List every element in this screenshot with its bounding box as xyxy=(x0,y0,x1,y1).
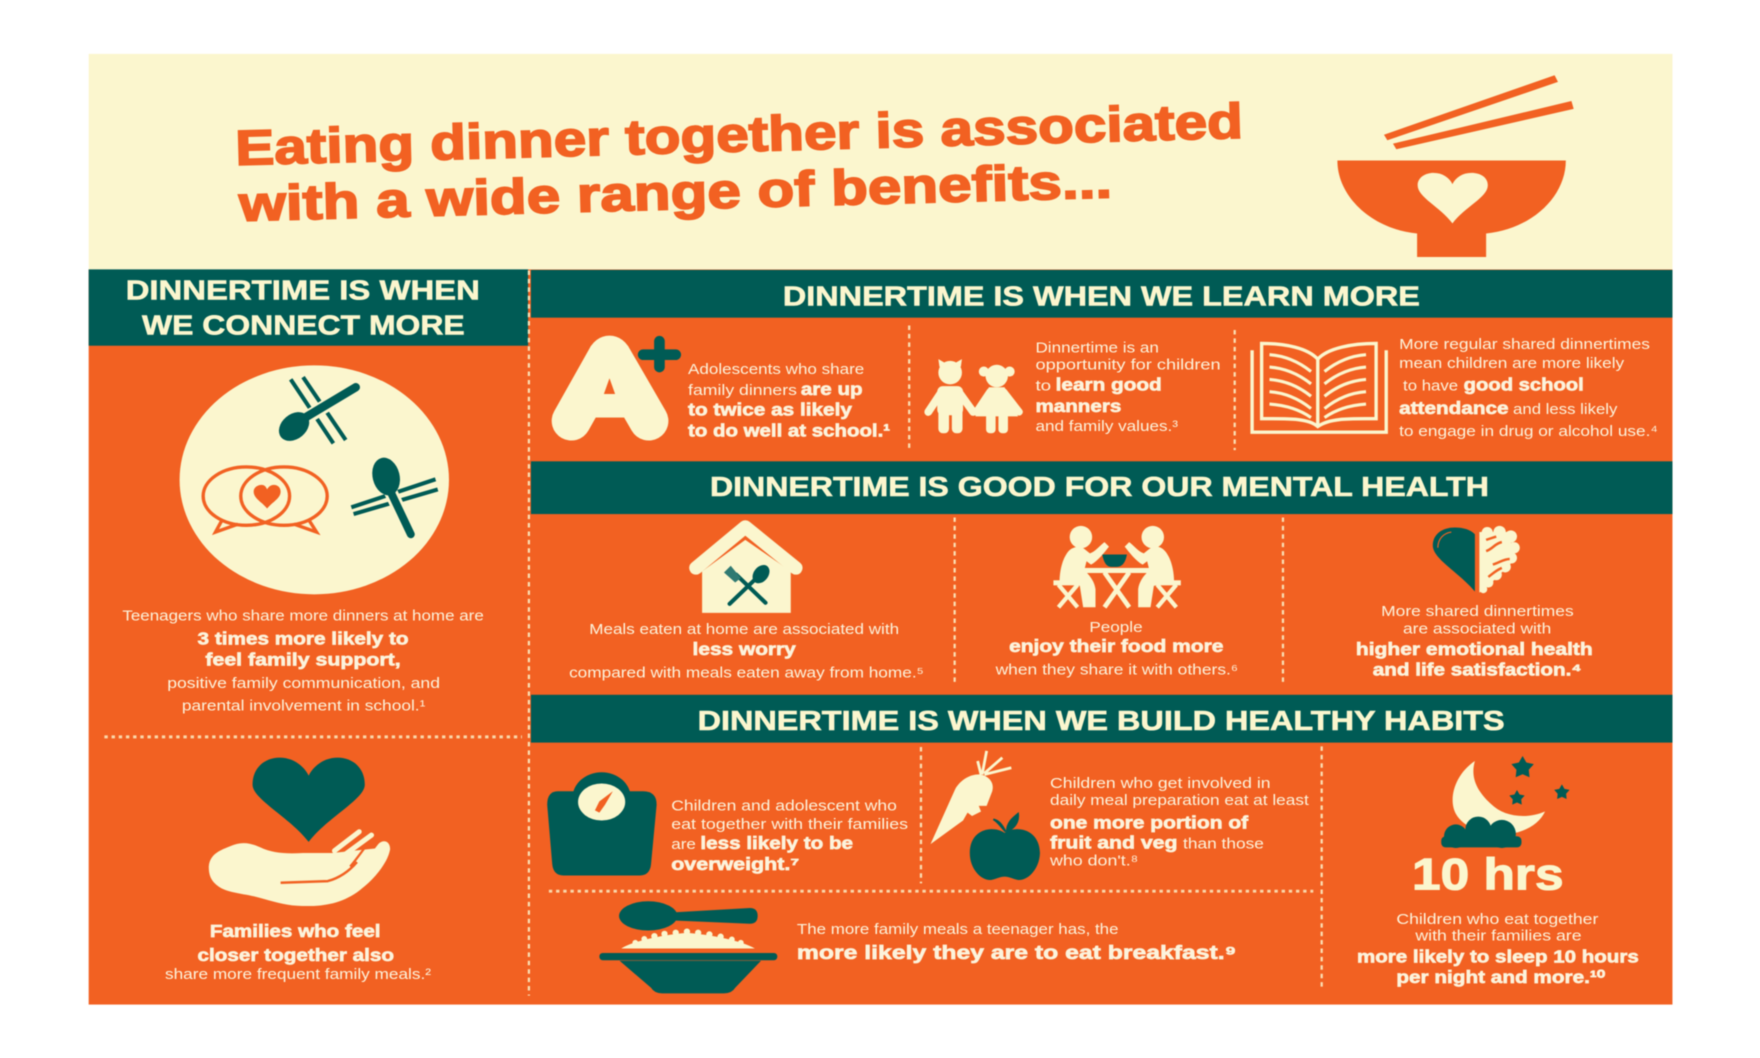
text: adolescents: are up xyxy=(801,379,863,399)
icon: half heart half brain xyxy=(1433,526,1520,593)
text: emotional health: More shared dinnertimes xyxy=(1381,603,1574,620)
text: manners: opportunity for children xyxy=(1035,356,1221,373)
text: families: Families who feel xyxy=(210,921,381,941)
panel: connect more xyxy=(89,269,528,983)
text: fruit and veg: one more portion of xyxy=(1050,812,1248,832)
icon: two children xyxy=(928,359,1019,433)
text: manners: learn good xyxy=(1056,375,1162,395)
text: emotional health: are associated with xyxy=(1403,620,1551,637)
text: sleep: with their families are xyxy=(1414,928,1582,945)
text: adolescents: family dinners xyxy=(688,382,797,399)
icon: A plus grade xyxy=(571,341,676,421)
text: attendance xyxy=(1399,336,1658,440)
text: emotional health xyxy=(1356,603,1593,680)
heading: connect more: DINNERTIME IS WHEN xyxy=(126,275,480,306)
icon: weighing scale xyxy=(547,772,657,875)
panel: healthy habits xyxy=(531,695,1672,993)
text: teenagers: parental involvement in school.¹ xyxy=(182,697,425,714)
icon: carrot and apple xyxy=(931,751,1040,880)
icon: heart above hand xyxy=(209,758,390,906)
text: overweight: Children and adolescent who xyxy=(671,797,897,814)
text: less worry: Meals eaten at home are associated with xyxy=(589,621,899,638)
text: fruit and veg: daily meal preparation eat at least xyxy=(1050,792,1310,809)
heading: learn more: DINNERTIME IS WHEN WE LEARN MORE xyxy=(783,280,1420,311)
text: attendance: More regular shared dinnertimes xyxy=(1399,336,1650,353)
text: manners: Dinnertime is an xyxy=(1035,339,1159,356)
text: attendance: to have xyxy=(1403,378,1458,395)
text: teenagers: positive family communication, and xyxy=(167,675,440,692)
icon: house with fork and spoon xyxy=(696,527,796,613)
title: Eating dinner together is associated xyxy=(235,94,1244,176)
text: emotional health: higher emotional health xyxy=(1356,639,1593,659)
text: teenagers: 3 times more likely to xyxy=(198,628,409,648)
text: manners: to xyxy=(1035,378,1051,395)
text: breakfast xyxy=(797,921,1236,964)
stat: 10 hrs: 10 hrs xyxy=(1412,849,1564,900)
icon: breakfast bowl and spoon xyxy=(599,901,777,993)
text: manners: manners xyxy=(1035,396,1121,416)
text: families: closer together also xyxy=(198,945,394,965)
text: manners xyxy=(1035,339,1221,435)
text: attendance: good school xyxy=(1464,375,1584,395)
text: overweight: are xyxy=(671,836,696,853)
text: teenagers xyxy=(122,608,484,714)
text: less worry: less worry xyxy=(693,639,796,659)
text: enjoy food: People xyxy=(1089,619,1143,636)
text: manners: and family values.³ xyxy=(1035,418,1178,435)
text: overweight: overweight.⁷ xyxy=(671,854,799,874)
panel: learn more xyxy=(531,270,1672,450)
text: enjoy food xyxy=(994,619,1238,679)
text: less worry xyxy=(569,621,924,681)
text: attendance: attendance xyxy=(1399,398,1509,418)
text: breakfast: The more family meals a teenager has, the xyxy=(797,921,1119,938)
text: fruit and veg: Children who get involved in xyxy=(1050,775,1271,792)
text: teenagers: feel family support, xyxy=(205,650,401,670)
heading: connect more: WE CONNECT MORE xyxy=(142,309,465,340)
text: adolescents: to do well at school.¹ xyxy=(688,421,890,441)
text: less worry: compared with meals eaten away from home.⁵ xyxy=(569,664,924,681)
text: fruit and veg: who don't.⁸ xyxy=(1049,852,1138,869)
text: adolescents xyxy=(688,361,890,441)
heading: connect more xyxy=(89,269,528,346)
icon: two people at table xyxy=(1053,526,1181,607)
heading: learn more xyxy=(531,270,1672,318)
text: sleep: per night and more.¹⁰ xyxy=(1396,967,1605,987)
icon: bowl with heart and chopsticks xyxy=(1337,75,1574,257)
heading: healthy habits xyxy=(531,695,1672,743)
panel: mental health xyxy=(531,461,1672,686)
text: breakfast: more likely they are to eat breakfast.⁹ xyxy=(797,942,1236,964)
text: fruit and veg xyxy=(1049,775,1310,869)
text: overweight xyxy=(671,797,909,874)
heading: mental health: DINNERTIME IS GOOD FOR OUR MENTAL HEALTH xyxy=(710,471,1489,502)
text: attendance: mean children are more likely xyxy=(1399,355,1625,372)
text: sleep: Children who eat together xyxy=(1396,911,1598,928)
text: enjoy food: when they share it with others.⁶ xyxy=(994,662,1238,679)
text: emotional health: and life satisfaction.⁴ xyxy=(1373,660,1582,680)
icon: plate circle with cutlery and speech bubbles xyxy=(180,365,449,594)
card background xyxy=(89,269,1672,1005)
text: overweight: eat together with their families xyxy=(671,816,909,833)
text: attendance: and less likely xyxy=(1513,401,1618,418)
text: attendance: to engage in drug or alcohol use.⁴ xyxy=(1399,423,1658,440)
icon: moon cloud and stars xyxy=(1441,756,1570,848)
heading: healthy habits: DINNERTIME IS WHEN WE BUILD HEALTHY HABITS xyxy=(698,705,1505,736)
text: fruit and veg: fruit and veg xyxy=(1050,833,1177,853)
panel: title banner xyxy=(89,54,1672,269)
text: enjoy food: enjoy their food more xyxy=(1009,636,1224,656)
heading: mental health xyxy=(531,461,1672,514)
text: teenagers: Teenagers who share more dinners at home are xyxy=(122,608,484,625)
title xyxy=(235,94,1245,232)
text: families xyxy=(165,921,431,983)
text: sleep xyxy=(1357,911,1639,987)
text: adolescents: Adolescents who share xyxy=(688,361,864,378)
text: sleep: more likely to sleep 10 hours xyxy=(1357,946,1639,966)
text: fruit and veg: than those xyxy=(1183,836,1264,853)
text: adolescents: to twice as likely xyxy=(688,399,852,419)
icon: open book xyxy=(1252,343,1386,432)
text: families: share more frequent family meals.² xyxy=(165,966,431,983)
text: overweight: less likely to be xyxy=(700,833,853,853)
title: with a wide range of benefits... xyxy=(237,153,1113,232)
